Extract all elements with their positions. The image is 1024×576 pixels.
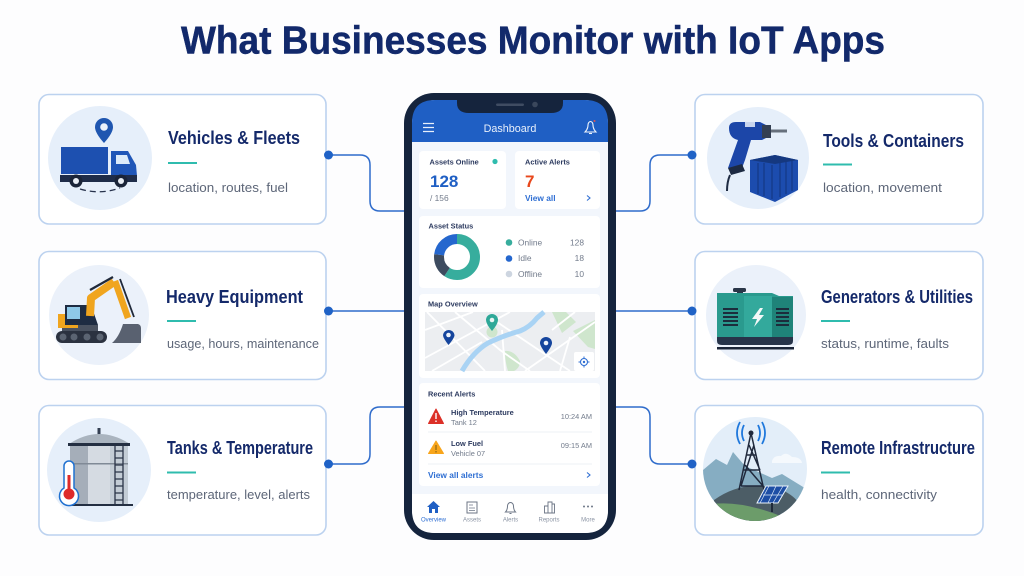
legend: 10: [575, 269, 584, 279]
stat card: assets online: Assets Online: [430, 158, 479, 166]
legend: 128: [570, 238, 584, 248]
alert: high temperature: High Temperature: [451, 408, 514, 417]
bottom navigation: More: [581, 518, 595, 524]
connectors: [324, 150, 696, 468]
text: equipment metrics: usage, hours, maintenance: [167, 337, 319, 351]
alert: low fuel: [428, 439, 592, 458]
panel: recent alerts: Recent Alerts: [428, 390, 475, 398]
bottom navigation: Overview: [421, 518, 447, 524]
heading: Tanks & Temperature: [167, 438, 313, 458]
title: What Businesses Monitor with IoT Apps: [181, 20, 885, 62]
stat card: assets online: 128: [430, 172, 458, 191]
panel: map overview: Map Overview: [428, 300, 478, 308]
panel: map overview: [419, 294, 600, 378]
icon: cell tower in mountains with solar panel: [703, 422, 808, 525]
alert: low fuel: Vehicle 07: [451, 449, 485, 458]
donut chart: [439, 239, 475, 275]
alert: low fuel: 09:15 AM: [561, 441, 592, 450]
panel: tanks and temperature: [39, 406, 326, 535]
icon: power tool and shipping container: [727, 122, 798, 202]
icon: storage tank with thermometer: [60, 428, 133, 506]
app header: Dashboard: [484, 123, 536, 135]
icon: generator: [717, 288, 794, 350]
heading: Heavy Equipment: [166, 287, 303, 307]
alert: low fuel: Low Fuel: [451, 439, 483, 448]
text: tool metrics: location, movement: [823, 181, 943, 195]
text: vehicles metrics: location, routes, fuel: [168, 181, 288, 195]
bottom navigation: Reports: [538, 518, 560, 524]
legend: 18: [575, 253, 584, 263]
map: [425, 312, 595, 371]
bottom navigation: Assets: [463, 518, 481, 524]
phone: [404, 93, 616, 540]
icon: excavator: [56, 277, 141, 343]
legend: Online: [518, 238, 543, 248]
text: tank metrics: temperature, level, alerts: [167, 488, 310, 502]
panel: remote infrastructure: [695, 406, 983, 535]
panel: recent alerts: [419, 383, 600, 486]
panel: heavy equipment: [39, 252, 326, 380]
app header: [412, 99, 608, 142]
bottom navigation: [412, 494, 608, 533]
stat card: active alerts: Active Alerts: [525, 158, 570, 166]
panel: tools and containers: [695, 94, 983, 224]
stat card: active alerts: [515, 151, 600, 209]
icon: delivery truck with location pin: [60, 118, 137, 192]
legend: Offline: [518, 269, 542, 279]
stat card: assets online: [419, 151, 506, 209]
alert: high temperature: [428, 408, 592, 427]
panel: asset status: Asset Status: [428, 222, 473, 230]
alert: high temperature: Tank 12: [451, 418, 477, 427]
bottom navigation: Alerts: [503, 518, 518, 524]
stat card: assets online: / 156: [430, 193, 449, 203]
heading: Generators & Utilities: [821, 287, 973, 307]
panel: recent alerts: View all alerts: [428, 470, 484, 480]
heading: Vehicles & Fleets: [168, 128, 300, 148]
stat card: active alerts: 7: [525, 172, 534, 191]
panel: asset status: [419, 216, 600, 288]
panel: generators and utilities: [695, 252, 983, 380]
panel: vehicles and fleets: [39, 94, 326, 224]
text: generator metrics: status, runtime, faults: [821, 337, 949, 351]
alert: high temperature: 10:24 AM: [561, 412, 592, 421]
legend: [506, 238, 584, 279]
heading: Remote Infrastructure: [821, 438, 975, 458]
stat card: active alerts: View all: [525, 193, 556, 203]
text: infrastructure metrics: health, connectivity: [821, 488, 938, 502]
heading: Tools & Containers: [823, 131, 964, 151]
legend: Idle: [518, 253, 532, 263]
